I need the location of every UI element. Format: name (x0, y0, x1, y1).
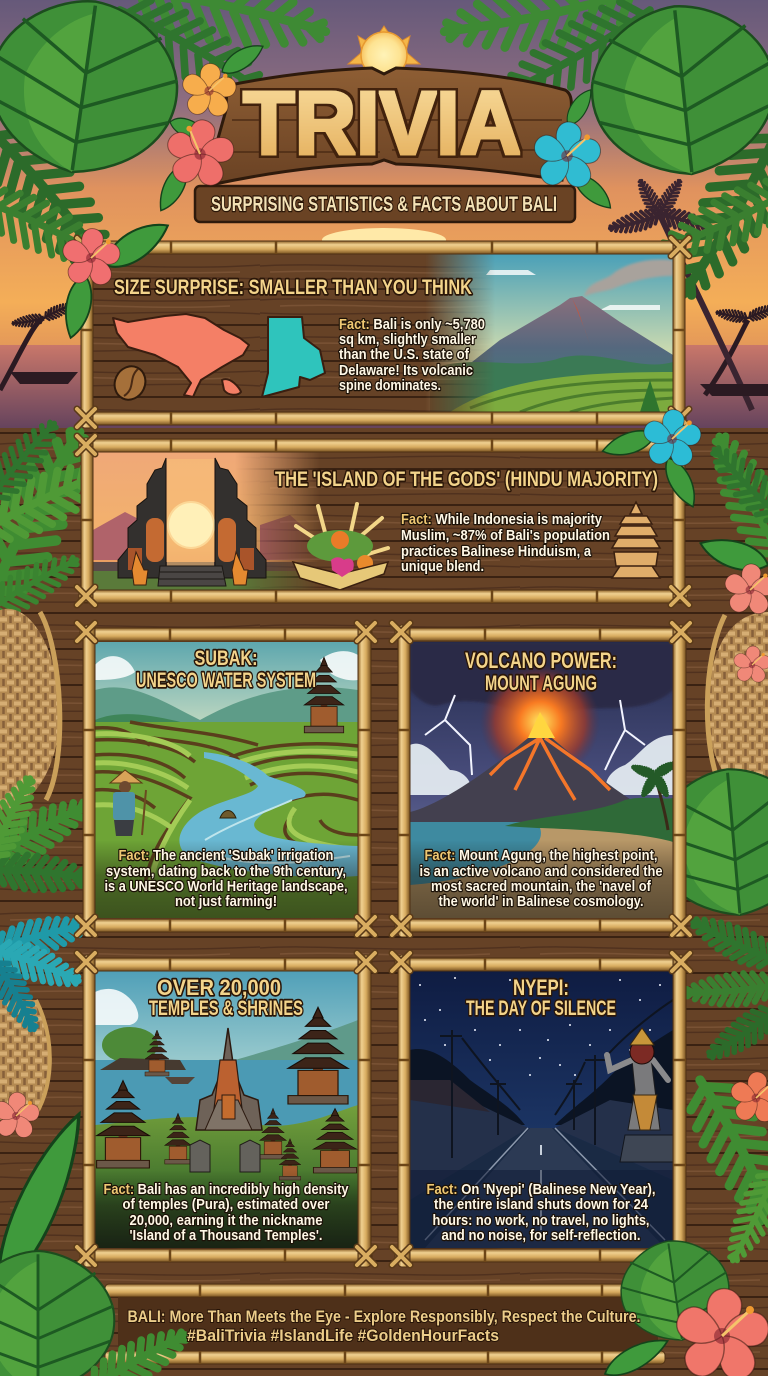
panel: volcano power: most sacred mountain, the 'navel of (431, 878, 652, 895)
subtitle text: SURPRISING STATISTICS & FACTS ABOUT BALI (211, 193, 557, 216)
panel: volcano power: the world' in Balinese cosmology. (438, 893, 644, 910)
icon: coffee bean (109, 361, 151, 405)
beach (410, 828, 673, 918)
top right monstera leaf (584, 0, 768, 184)
sun icon above sign (348, 26, 420, 78)
power poles (440, 1000, 673, 1158)
sunset sky background (0, 0, 768, 420)
lava (490, 738, 610, 800)
footer text (128, 1307, 640, 1345)
sea (95, 1060, 358, 1130)
sunset temple scene (93, 452, 333, 590)
sea at sunset (0, 345, 768, 435)
bamboo frame: panel 2 (77, 436, 689, 605)
grass (95, 1105, 358, 1248)
white clouds (410, 735, 673, 795)
panel: subak: UNESCO WATER SYSTEM (136, 669, 316, 692)
setting sun behind panels (322, 228, 446, 252)
top left monstera leaf (0, 0, 188, 185)
panel: subak: system, dating back to the 9th century, (106, 863, 346, 880)
panel: size surprise: spine dominates. (339, 377, 441, 394)
icon: panel 1 hibiscus with teal leaves (55, 217, 176, 341)
terraces (95, 722, 358, 918)
left shoreline: palms and boat (0, 177, 768, 410)
panel: nyepi: THE DAY OF SILENCE (466, 997, 616, 1020)
icon: teal hibiscus (531, 122, 604, 192)
footer banner (105, 1284, 665, 1364)
bamboo frame: panel 1 (77, 238, 689, 428)
road (425, 1128, 665, 1248)
right palm (684, 909, 768, 1068)
distant hill (235, 1020, 358, 1070)
heading: OVER 20,000 (157, 975, 281, 1000)
buildings (410, 1085, 673, 1200)
panel: temples and shrines (95, 970, 358, 1248)
bottom left leaves (0, 1108, 194, 1376)
icon: left lower flower (0, 1092, 42, 1141)
icon: right side flowers and leaves (697, 527, 768, 1125)
side palm fronds (0, 108, 768, 312)
panel: subak (95, 642, 358, 918)
ogoh-ogoh statue (607, 1028, 673, 1162)
title text: TRIVIA (243, 74, 521, 174)
sea temple islet (100, 1027, 195, 1084)
icon: panel 2 hibiscus with leaves (600, 410, 704, 512)
panel: island of the gods (93, 452, 673, 590)
sea (410, 822, 673, 918)
top palm fronds (106, 0, 665, 122)
icon: pagoda (612, 502, 660, 578)
map: Delaware shape (262, 317, 325, 397)
fact text: Fact: Bali is only ~5,780 (339, 316, 485, 333)
footer line 1: BALI: More Than Meets the Eye - Explore Responsibly, Respect the Culture. (128, 1307, 640, 1326)
footer line 2: #BaliTrivia #IslandLife #GoldenHourFacts (187, 1326, 499, 1345)
shrines row (97, 1081, 357, 1180)
pagoda (304, 657, 344, 733)
left fern (0, 412, 125, 624)
tall meru (288, 1007, 348, 1104)
farmer (110, 770, 146, 836)
panel: size surprise: Delaware! Its volcanic (339, 362, 473, 379)
panel: nyepi: the entire island shuts down for 24 (434, 1196, 649, 1213)
bamboo frames: lower panels (77, 623, 690, 1267)
subtitle plank (195, 186, 575, 222)
panel: temples and shrines: TEMPLES & SHRINES (149, 997, 303, 1020)
map: Bali (113, 314, 249, 397)
icon: offering basket (293, 504, 388, 590)
treeline (505, 798, 673, 842)
right fern lower (676, 1066, 768, 1268)
heading: SUBAK: (194, 647, 258, 670)
panel: nyepi (410, 970, 673, 1248)
volcano (410, 738, 673, 835)
eruption glow (480, 664, 600, 780)
fact text: Fact: The ancient 'Subak' irrigation (118, 847, 334, 864)
dark treeline (410, 1030, 673, 1125)
right fern (697, 426, 768, 572)
palms (631, 759, 678, 830)
panel: temples and shrines: of temples (Pura), estimated over (122, 1196, 330, 1213)
heading: THE 'ISLAND OF THE GODS' (HINDU MAJORITY) (275, 468, 658, 491)
fact text: Fact: While Indonesia is majority (401, 511, 603, 528)
panel: temples and shrines: 20,000, earning it the nickname (130, 1212, 322, 1229)
panel: temples and shrines: 'Island of a Thousand Temples'. (130, 1227, 322, 1244)
ground (410, 1128, 673, 1248)
volcano landscape (420, 254, 673, 412)
clouds (95, 989, 138, 1025)
panel: island of the gods: unique blend. (401, 558, 484, 575)
panel: subak: not just farming! (175, 893, 277, 910)
panel: island of the gods: Muslim, ~87% of Bali's population (401, 527, 610, 544)
header leaves (150, 41, 615, 216)
woven mat right (707, 612, 768, 792)
split gate (118, 458, 266, 586)
storm clouds (410, 642, 673, 717)
heading: VOLCANO POWER: (465, 648, 617, 673)
panel: nyepi: hours: no work, no travel, no lights, (432, 1212, 650, 1229)
lower left palms (0, 772, 96, 1036)
heading: SIZE SURPRISE: SMALLER THAN YOU THINK (114, 276, 472, 299)
river (179, 752, 358, 877)
panel: volcano power: MOUNT AGUNG (485, 672, 597, 695)
clouds (95, 651, 358, 680)
panel: size surprise (93, 254, 673, 412)
title sign (211, 68, 571, 184)
icon: orange hibiscus (180, 64, 239, 120)
heading: NYEPI: (513, 975, 569, 1000)
panel: subak: is a UNESCO World Heritage landscape, (104, 878, 348, 895)
panel: volcano power (410, 642, 678, 918)
panel: size surprise: than the U.S. state of (339, 346, 470, 363)
right monstera (648, 762, 768, 922)
wooden plank background (0, 428, 768, 1376)
bottom right leaves and hibiscus (599, 1234, 768, 1376)
woven mat left (0, 609, 60, 1120)
panel: island of the gods: practices Balinese Hinduism, a (401, 543, 592, 560)
panel: size surprise: sq km, slightly smaller (339, 331, 476, 348)
main shrine (196, 1028, 262, 1130)
fact text: Fact: On 'Nyepi' (Balinese New Year), (426, 1181, 656, 1198)
panel: volcano power: is an active volcano and considered the (420, 863, 662, 880)
fact text: Fact: Mount Agung, the highest point, (424, 847, 658, 864)
panel: nyepi: and no noise, for self-reflection. (442, 1227, 640, 1244)
icon: pink hibiscus (156, 108, 246, 200)
stars (420, 978, 660, 1075)
fact text: Fact: Bali has an incredibly high density (104, 1181, 349, 1198)
lightning (425, 695, 645, 775)
mountains (95, 687, 358, 770)
